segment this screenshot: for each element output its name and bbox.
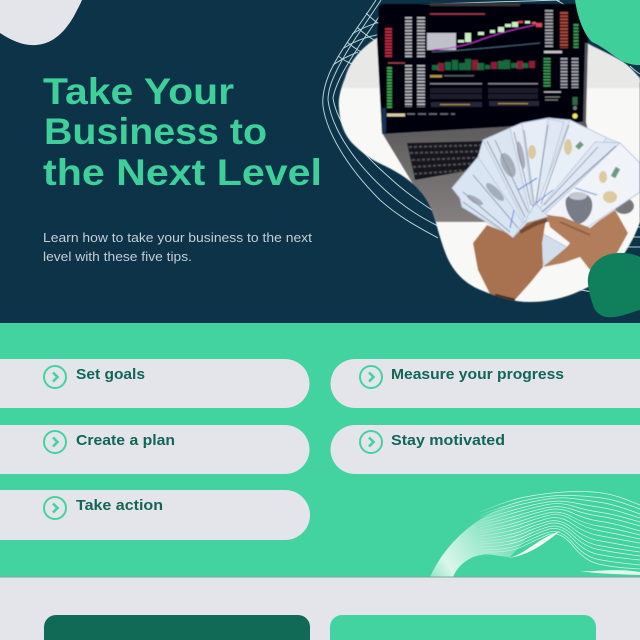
tip pill: Set goals — [0, 359, 310, 408]
photo: laptop and cash — [330, 3, 640, 308]
title: Business to — [44, 111, 267, 152]
laptop screen — [377, 3, 588, 134]
photo: fan of banknotes — [452, 118, 640, 265]
tip pill: Take action: Take action — [76, 497, 163, 514]
panel: light lower section — [0, 577, 640, 640]
decorative blob: bottom right dark green — [588, 253, 640, 317]
subtitle text: Learn how to take your business to the next — [43, 230, 312, 245]
icon: chevron circle — [360, 431, 382, 453]
decorative blob: top left — [0, 0, 82, 45]
screen: order panels — [430, 75, 539, 107]
photo: hands — [473, 210, 628, 302]
panel: dark hero background — [0, 0, 640, 323]
card: mint — [330, 615, 596, 640]
title — [43, 71, 322, 193]
card: dark green — [44, 615, 310, 640]
panel: mint tips section — [0, 323, 640, 577]
tip pill: Stay motivated — [330, 425, 640, 474]
tip pill: Set goals: Set goals — [76, 366, 145, 383]
subtitle text: level with these five tips. — [43, 249, 192, 264]
subtitle text — [43, 230, 312, 264]
title: Take Your — [43, 71, 234, 112]
laptop base — [382, 122, 600, 222]
screen: right columns — [544, 10, 578, 119]
tip pill: Create a plan: Create a plan — [76, 432, 175, 449]
tip pill: Measure your progress — [330, 359, 640, 408]
tip pill: Take action — [0, 490, 310, 540]
title: the Next Level — [43, 152, 322, 193]
screen: price chart — [427, 21, 542, 52]
decorative blob: top right mint — [575, 0, 640, 65]
screen: volume bars — [432, 59, 535, 71]
icon: chevron circle — [44, 366, 66, 388]
tip pill: Stay motivated: Stay motivated — [391, 432, 505, 449]
tip pill: Create a plan — [0, 425, 310, 474]
icon: chevron circle — [44, 431, 66, 453]
photo background wall and table — [330, 30, 640, 308]
wire line loops around the photo — [323, 0, 640, 292]
photo: under-bill shadow — [614, 198, 634, 214]
icon: chevron circle — [360, 366, 382, 388]
icon: chevron circle — [44, 497, 66, 519]
graphic: white wave lines — [430, 491, 640, 577]
tip pill: Measure your progress: Measure your progress — [391, 366, 564, 383]
screen: left order book — [387, 14, 485, 115]
